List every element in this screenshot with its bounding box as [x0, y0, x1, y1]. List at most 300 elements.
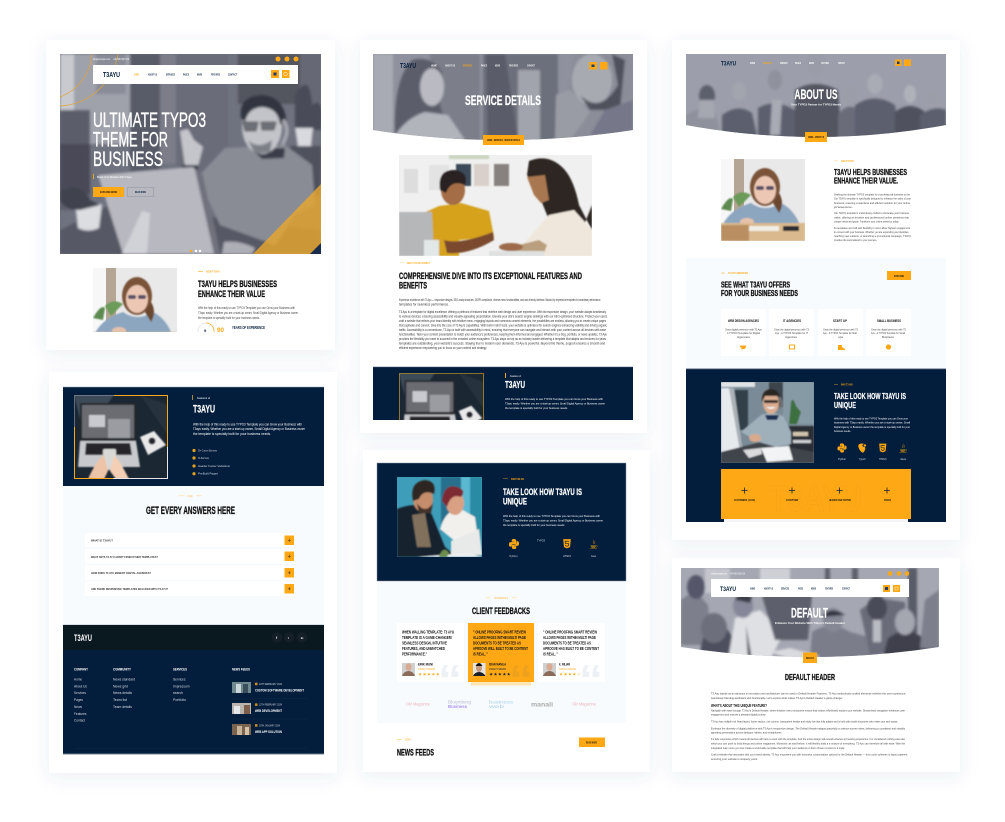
testimonial card 1: FEATURES, AND UNMATCHED — [402, 646, 445, 651]
hero photo — [60, 54, 321, 254]
partner logos: business — [489, 700, 513, 704]
technology icons: HTML5 — [563, 554, 572, 558]
footer column: news feeds: CUSTOM SOFTWARE DEVELOPMENT — [255, 688, 305, 692]
FAQ rows — [85, 533, 295, 596]
about section text: T3ayu easily. Whether you are a start-up owner, Small Digital Agency or Business owner — [198, 311, 299, 315]
partner logos: Bloomberg — [448, 700, 472, 704]
testimonial card 1: ★★★★★ — [418, 672, 440, 676]
footer column: news feeds: 10TH JANUARY 2024 — [259, 724, 281, 728]
navigation bar — [93, 65, 298, 84]
footer column: community: News details — [113, 691, 132, 695]
footer column: community — [113, 668, 135, 709]
about section text: ENHANCE THEIR VALUE — [198, 289, 265, 299]
unique body copy: T3ayu easily. Whether you are a start-up owner, Small Digital Agency or Business owner — [503, 518, 603, 522]
unique body copy: With the help of this ready to use TYPO3 Template you can Grow your Business with — [503, 514, 600, 518]
default body copy: T3 Ayu stands as an advance in innovation and architecture can be used in Default Header Features. T3 Ayu meticulously crafted elements redefine the user experience, — [711, 692, 906, 696]
footer column: company: About Us — [74, 684, 87, 688]
service card: start up — [818, 309, 863, 356]
service features band: the template is specially built for your business needs. — [505, 406, 568, 410]
footer column: services — [173, 668, 190, 702]
features band — [63, 386, 324, 486]
orange stats panel: CUSTOM — [786, 498, 799, 502]
footer top: T3AYU — [74, 633, 92, 643]
footer column: community: News standard — [113, 678, 135, 682]
about text block: ENHANCE THEIR VALUE. — [834, 176, 898, 186]
default nav bar: FEATURES — [825, 588, 833, 590]
about text block: presence. — [834, 205, 853, 209]
technology icons: Python — [510, 554, 518, 558]
hero title: THEME FOR — [93, 128, 168, 152]
navigation bar: PAGES — [183, 74, 189, 76]
default title: Enhance Your Website With T3ayu's Default Header — [775, 621, 846, 625]
about nav: ABOUT US — [763, 62, 772, 65]
why body copy: With the help of this ready to use TYPO3 Template you can Grow your — [834, 416, 908, 420]
service photo: two people at laptop — [399, 155, 592, 256]
why body copy: Digital Agency or Business owner the template is specially built for your — [834, 425, 910, 429]
experience gauge: 9 — [204, 328, 207, 333]
unique body copy: the template is specially built for your business needs. — [503, 523, 565, 527]
orange stats panel: CUSTOMERS (44.6%) — [734, 498, 755, 502]
navigation bar: NEWS — [197, 74, 202, 76]
default top bar: +49 000 000 000 — [730, 572, 745, 576]
read more button: READ MORE — [586, 740, 597, 744]
about nav: NEWS — [809, 62, 814, 65]
panel: service details preview — [360, 40, 647, 449]
service card: IT agencies: Agencies — [785, 336, 798, 339]
testimonial card 1: PERFORMANCE." — [402, 652, 427, 656]
testimonial card 1: FOUNDER, T3 TEMPLATES — [418, 668, 435, 671]
footer column: news feeds — [232, 668, 307, 735]
service title: SERVICE DETAILS — [465, 92, 541, 108]
service card: small business: Ayu - A TYPO3 Template for Small — [871, 332, 905, 335]
default nav bar — [711, 579, 909, 597]
about nav: CONTACT — [838, 62, 845, 65]
testimonial card 1 — [397, 623, 464, 703]
testimonial card 3: FOUNDER, T3 TEMPLATES — [559, 668, 576, 671]
top bar — [93, 56, 298, 62]
testimonial card 3: K. WILIAM — [559, 662, 570, 666]
technology icons: HTML5 — [879, 458, 887, 461]
default body copy: engagement and ensures a pleasant digital journey. — [711, 712, 766, 716]
partner logos — [406, 700, 596, 709]
technology icons — [509, 538, 597, 558]
technology icons — [837, 443, 907, 461]
FAQ rows: ARE THERE RESPONSIVE TEMPLATES INCLUDED WITH T3 AYU? — [91, 587, 168, 591]
FAQ section: GET EVERY ANSWERS HERE — [146, 505, 235, 517]
panel: home page preview — [46, 40, 335, 350]
default body copy: WHAT'S ABOUT THIS UNIQUE FEATURE? — [711, 703, 767, 708]
footer column: community: COMMUNITY — [113, 668, 131, 672]
testimonial card 1: WHEN WALLING TEMPLATE: T3 AYU — [402, 630, 454, 634]
about hero: team photo — [686, 54, 946, 137]
testimonial card 2: highlighted — [468, 623, 534, 703]
about text block — [834, 159, 911, 242]
testimonial card 2: highlighted: ALLOWS PAGES WITHIN MULTI PAGE — [473, 635, 526, 640]
panel: about us preview — [672, 40, 960, 540]
service label: WHAT YOU GET FROM IT — [407, 261, 430, 265]
service card: web design agencies: a TYPO3 Template for Digital — [727, 332, 760, 335]
about text block: Its templates are built with flexibility in mind, allow highest engagement — [834, 226, 910, 230]
navigation bar: HOME — [134, 74, 139, 76]
footer column: news feeds: WEB APP SOLUTION — [255, 730, 282, 734]
about nav: FEATURES — [821, 62, 829, 65]
service card: web design agencies — [721, 309, 766, 356]
partner logos: web — [489, 704, 505, 709]
default heading: DEFAULT HEADER — [785, 672, 835, 682]
news feeds heading: NEWS FEEDS — [397, 748, 434, 758]
footer column: company: News — [74, 705, 82, 709]
service body copy: templates for seamless performance. — [399, 302, 449, 306]
service card: start up: Ayu - A TYPO3 Template for Start — [823, 332, 857, 335]
FAQ rows: WHAT SETS T3 AYU APART FROM OTHER TEMPLATES? — [91, 555, 158, 559]
feature bullet list: Header Footer Variations — [198, 464, 230, 468]
about breadcrumb — [805, 132, 827, 142]
partner logos: Business — [448, 704, 468, 709]
about text block: Seeking the ultimate TYPO3 template for a professional business to the — [834, 192, 910, 196]
footer column: community: Team details — [113, 705, 132, 709]
feature bullet list: PreBuilt Pages — [198, 472, 218, 476]
about section text: the template is specially built for your business needs. — [198, 316, 260, 320]
read more button — [579, 738, 605, 747]
services section: SEE WHAT T3AYU OFFERS — [721, 280, 790, 290]
FAQ section: FAQ — [188, 494, 193, 498]
FAQ section — [63, 486, 324, 625]
about photo — [93, 268, 177, 332]
technology icons: Java — [900, 458, 907, 461]
features band: Features of — [197, 396, 210, 400]
footer column: company — [74, 668, 88, 722]
testimonial card 1: SEAMLESS DESIGN, INTUITIVE — [402, 640, 447, 646]
default body copy: Embrace the diversity of digital platforms with T3 Ayu's responsive design. The Default Header adapts gracefully to various screen sizes, delivering a consistent and visually — [711, 726, 905, 730]
service nav: FEATURES — [509, 64, 518, 68]
testimonial card 2: highlighted: APROOVE WILL BUILT TO BE CONTENT — [473, 646, 528, 651]
about text block: T3AYU HELPS BUSINESSES — [834, 168, 907, 177]
experience gauge — [198, 323, 265, 334]
panel: default header preview — [672, 558, 960, 772]
top bar: +49 000 000 000 — [113, 57, 129, 61]
view more button — [887, 271, 911, 280]
service body copy: that captivate and convert. Dive into the core of T3 Ayu's capabilities. With built-in SEO tools, your website is optimized for search engines enhancing visibility and driving organic — [399, 324, 607, 328]
service body copy: provides the flexibility you need to succeed in the crowded online ecosystem. T3 Ayu stays on top as an industry leader delivering a template that adapts and endures for years — [399, 337, 606, 341]
footer column: services: SERVICES — [173, 668, 187, 672]
hero subtitle — [93, 174, 132, 179]
testimonial card 2: highlighted: ISIGN MANILA — [489, 662, 506, 666]
service body copy — [399, 298, 607, 350]
default body copy: It's fully responsive which means all devices will have to work with the template. And the entire design will overall enhance a browsing experience. It is considered nothing else else — [711, 737, 905, 741]
navigation bar: T3AYU — [103, 72, 120, 79]
service body copy: Experience excellence with T3 Ayu — responsive designs, SEO-ready structures, GDPR compliance, diverse menu functionalities, and user-friendly interface. Backed by impressive templates for seamless performance. — [399, 298, 601, 302]
service nav: CONTACT — [527, 64, 535, 68]
about title: ABOUT US — [794, 86, 838, 102]
default nav bar: ABOUT US — [764, 588, 773, 590]
default nav bar: PAGES — [798, 588, 803, 590]
about title: Your TYPO3 Partner for TYPO3 Needs — [791, 102, 841, 106]
service body copy: craft a website that reflects your brand identity with intuitive menu, engaging layouts and numerous content elements, the possibilities are endless, allowing you to create unique pages — [399, 319, 606, 323]
service nav: T3AYU — [400, 63, 416, 70]
service card: start up: Grow the digital presence with T3 — [823, 328, 859, 331]
service heading — [399, 271, 582, 290]
about title — [791, 86, 841, 106]
footer column: services: Services — [173, 678, 186, 682]
photo: two people at laptop — [397, 477, 482, 557]
why heading: TAKE LOOK HOW T3AYU IS — [834, 392, 906, 401]
technology icons: Python — [838, 458, 847, 461]
service features band: With the help of this ready to use TYPO3 Template you can Grow your Business with — [505, 397, 603, 401]
default body copy: which you can push to build things and online magazines. Moreover, as said before, it will flexibly build a a mixture of everything. T3 Ayu can therefore all with ease. With the — [711, 742, 905, 746]
orange stats panel: HEADER AND FOOTER — [829, 498, 851, 502]
service card: small business — [866, 309, 911, 356]
about text block: reaching new markets, or launching a promotional campaign, T3AYU — [834, 234, 911, 238]
footer column: company: COMPANY — [74, 668, 88, 672]
default body copy: appealing presentation across desktops, tablets, and smartphones. — [711, 730, 782, 734]
about text block: provides the tools tailored to your success. — [834, 238, 877, 242]
orange stats panel: PAGES — [884, 498, 891, 502]
default body copy: integrated map menu you can create a world-wide template that will help your audience in their chosen content in a snap. — [711, 746, 845, 750]
experience gauge: YEARS OF EXPERIENCE — [232, 325, 265, 330]
technology icons: TYPO3 — [537, 538, 546, 542]
hero subtitle: Boost Your Website With T3ayu — [97, 175, 132, 179]
testimonial card 3: DOCUMENTS TO BE TREATED AS — [543, 640, 591, 646]
testimonial card 3: ALLOWS PAGES WITHIN MULTI PAGE — [543, 635, 596, 640]
feature bullet list: 30+ Custom Elements — [198, 448, 217, 452]
service features band — [373, 366, 633, 449]
panel: features, FAQ and footer preview — [49, 372, 337, 773]
service card: IT agencies: Ayu - A TYPO3 Template for IT — [775, 332, 808, 335]
service nav: SERVICES — [463, 64, 472, 68]
service card: web design agencies: Agencies — [737, 336, 751, 339]
why body copy: business needs. — [834, 429, 851, 433]
default breadcrumb: DEFAULT — [806, 657, 814, 660]
panel: unique features and testimonials preview — [363, 450, 650, 772]
footer column: company: Features — [74, 712, 87, 716]
feature bullet list — [192, 448, 230, 476]
service card: IT agencies: IT AGENCIES — [783, 319, 801, 323]
service card: start up: ups — [838, 336, 844, 339]
why label — [834, 382, 853, 386]
view more button: EXPLORE — [894, 274, 904, 278]
service features band: T3ayu easily. Whether you are a start-up owner, Small Digital Agency or Business owner — [505, 402, 605, 406]
orange stats panel — [721, 469, 911, 522]
navigation bar: ABOUT US — [148, 74, 157, 76]
service card: start up: START UP — [833, 319, 847, 323]
testimonial card 2: highlighted: “ — [509, 656, 533, 703]
service body copy: T3 Ayu is a template for digital excellence offering a plethora of features that redefine web design and user experience. With its responsive design, your website adapts seamlessly — [399, 310, 606, 314]
footer body — [63, 650, 324, 754]
technology icons: Typo3 — [859, 458, 866, 461]
hero title — [93, 109, 206, 171]
about text block: Our T3AYU template is specifically designed to enhance the value of your — [834, 197, 911, 201]
service body copy: to various devices, ensuring accessibility and visually appealing presentation. Elevate your site's search engine rankings with our SEO-optimized structure. Protect your users — [399, 314, 607, 318]
partner logos: Oki Magazine — [406, 702, 430, 706]
navigation bar: SERVICES — [166, 74, 175, 76]
testimonial card 3: " ONLINE PROOFING SMART REVIEW — [543, 630, 597, 634]
why us section — [686, 368, 946, 522]
testimonial card 2: highlighted: " ONLINE PROOFING SMART REVIEW — [473, 630, 526, 634]
testimonial card 3: “ — [579, 656, 603, 703]
about text block: ABOUT T3AYU — [841, 159, 854, 163]
service body copy: functionalities. Tailor your content presentation to match your audience's preferences, keeping them informed and engaged. Whether it's a blog, portfolio, or news updates, T3 Ayu — [399, 332, 607, 336]
about text block: business, ensuring a seamless and efficient solution for your online — [834, 201, 910, 205]
about nav — [721, 60, 911, 68]
why label: WHY T3 AYU — [841, 382, 853, 386]
about nav: PAGES — [795, 62, 801, 65]
about breadcrumb: HOME - ABOUT US — [808, 136, 824, 139]
breadcrumb: HOME - SERVICES - SERVICE DETAILS — [487, 139, 520, 142]
service card: IT agencies: Grow the digital presence with T3 — [774, 328, 810, 331]
unique label — [503, 477, 524, 481]
service heading: COMPREHENSIVE DIVE INTO ITS EXCEPTIONAL FEATURES AND — [399, 271, 582, 281]
about photo — [721, 159, 805, 241]
footer column: services: Impressum — [173, 684, 190, 688]
service features band: T3AYU — [505, 380, 525, 391]
about text block: unique needs and goals. Transform your online presence today. — [834, 220, 899, 224]
footer column: company: Home — [74, 678, 82, 682]
about nav: SERVICES — [780, 62, 788, 65]
service card: small business: SMALL BUSINESS — [877, 319, 901, 323]
footer top — [63, 624, 324, 650]
features band: With the help of this ready to use TYPO3 Template you can Grow your Business with — [193, 422, 302, 426]
services section: T3 AYU SERVICES — [728, 271, 748, 275]
about section text: ABOUT T3AYU — [206, 270, 220, 274]
unique heading: TAKE LOOK HOW T3AYU IS — [503, 487, 582, 497]
footer column: services: search — [173, 691, 183, 695]
service hero photo — [373, 54, 633, 140]
about text block: value, offering an intuitive and professional online presence that — [834, 216, 909, 220]
testimonial card 1: TEMPLATE IS A GAME-CHANGER! — [402, 635, 452, 640]
why heading — [834, 392, 906, 410]
default top bar: info@example.com — [711, 572, 728, 576]
service nav: PAGES — [481, 64, 487, 68]
about text block: Our T3AYU template is meticulously crafted to showcase your business — [834, 211, 909, 215]
footer column: community: News grid — [113, 684, 128, 688]
hero buttons: EXPLORE MORE — [100, 190, 117, 194]
hero buttons: READ MORE — [135, 190, 146, 194]
service nav — [400, 62, 608, 70]
service nav: HOME — [431, 64, 437, 68]
navigation bar: FEATURES — [211, 74, 220, 76]
default nav bar: SERVICES — [781, 588, 789, 590]
default nav bar: HOME — [750, 588, 755, 590]
about section text — [198, 270, 299, 320]
footer column: news feeds: WEB DEVELOPMENT — [255, 709, 283, 713]
partner logos: Oki Magazine — [572, 702, 596, 706]
default body copy: seamlessly blending aesthetics with functionality. Let's explore what makes T3 Ayu's Default Header a game changer. — [711, 696, 843, 700]
news feeds heading — [397, 738, 434, 758]
service features band: Features of — [510, 374, 521, 378]
unique label: WHAT WE DO — [511, 477, 524, 481]
why body copy — [834, 416, 910, 433]
client feedback section: CLIENT FEEDBACKS — [472, 606, 530, 616]
footer column: services: Portfolio — [173, 698, 186, 702]
default top bar — [711, 571, 909, 576]
services section: FOR YOUR BUSINESS NEEDS — [721, 288, 798, 298]
service card: web design agencies: Grow digital presence with T3 Ayu — [725, 328, 763, 331]
testimonial card 2: highlighted: FOUNDER, T3 TEMPLATES — [489, 668, 506, 671]
client feedback section: TESTIMONIALS — [494, 596, 508, 600]
service body copy: efficient experience empowering you to focus on your content and strategy. — [399, 346, 487, 350]
news feeds heading: NEWS — [405, 738, 411, 742]
about section text: T3AYU HELPS BUSINESSES — [198, 279, 277, 289]
about nav: T3AYU — [721, 60, 736, 68]
service card: IT agencies — [769, 309, 814, 356]
unique heading: UNIQUE — [503, 496, 527, 506]
footer column: news feeds: 12TH FEBRUARY 2024 — [259, 683, 283, 686]
default title: DEFAULT — [791, 605, 828, 621]
FAQ rows: WHAT IS T3AYU? — [91, 538, 113, 542]
hero title: BUSINESS — [93, 148, 163, 171]
default body copy: ensuring your website is uniquely yours. — [711, 757, 758, 761]
default hero: meeting photo — [681, 568, 939, 662]
partner logos: manali — [531, 702, 553, 708]
service card: small business: Business — [882, 336, 895, 339]
default body copy: Navigate with ease through T3 Ayu's Default Header, where intuitive menu structures ensure that visitors effortlessly explore your website. Streamlined navigation enhances user — [711, 708, 905, 712]
photo: man at computer — [721, 382, 814, 463]
default body copy: T3 Ayu has multiple rich Head layout, footer section, one column, transparent header and sticky bar that fully adapts and is built with simple structures who make your web space. — [711, 720, 898, 724]
footer top: f — [276, 636, 278, 640]
service card: web design agencies: WEB DESIGN AGENCIES — [728, 319, 759, 323]
service body copy: templates are outstanding, your website's success. Staying true to modern user demands, T3 Ayu is powerful. Beyond the theme, support ensures a smooth and — [399, 342, 605, 346]
testimonial card 3: ★★★★☆ — [559, 672, 581, 676]
orange stats panel: T3AYU — [770, 478, 862, 519]
default body copy — [711, 692, 908, 761]
testimonial card 1: ERIK MUNI — [418, 662, 433, 666]
about section text: With the help of this ready to use TYPO3 Template you can Grow your Business with — [198, 306, 295, 310]
feature bullet list: 99+ Best Scores — [198, 456, 209, 460]
navy unique section — [377, 463, 626, 581]
navigation bar: CONTACT — [228, 74, 237, 76]
default nav bar: T3AYU — [720, 586, 736, 593]
footer top: t — [288, 636, 289, 640]
FAQ rows: HOW DOES T3 AYU BENEFIT DIGITAL AGENCIES? — [91, 571, 151, 575]
client feedback section — [377, 582, 626, 723]
service nav: NEWS — [495, 64, 500, 68]
service card: small business: Grow the digital presence with T3 — [871, 328, 907, 331]
top bar: info@example.com — [93, 57, 110, 61]
testimonial card 3: APROOVE HAS BUILT TO BE CONTENT — [543, 646, 599, 651]
experience gauge: 90 — [217, 328, 225, 334]
why body copy: business with T3ayu easily. Whether you are a start-up owner, Small — [834, 420, 910, 424]
features band: the template is specially built for your business needs. — [193, 432, 271, 436]
testimonial card 3: IS REAL. " — [543, 652, 558, 656]
testimonial card 2: highlighted: DOCUMENTS TO BE TREATED AS — [473, 640, 521, 646]
hero title: ULTIMATE TYPO3 — [93, 109, 206, 132]
default nav bar: CONTACT — [842, 588, 850, 590]
default body copy: Craft a website that resonates with your brand identity. T3 Ayu empowers you with extensive customization options for the Default Header — from color schemes to layout patterns, — [711, 752, 908, 756]
unique body copy — [503, 514, 603, 527]
service body copy: traffic. Accessibility is a cornerstone, T3 Ayu is built with accessibility in mind, ensuring that everyone can navigate and interact with your content across all devices with ease — [399, 328, 606, 332]
testimonial card 3 — [538, 623, 605, 703]
testimonial card 2: highlighted: ★★★★★ — [489, 672, 511, 676]
footer column: community: Team list — [113, 698, 127, 702]
technology icons: Java — [591, 554, 597, 558]
testimonial card 2: highlighted: IS REAL. " — [473, 652, 488, 656]
why heading: UNIQUE — [834, 401, 856, 410]
services section — [686, 258, 946, 369]
about nav: HOME — [750, 62, 755, 65]
service nav: ABOUT US — [445, 64, 455, 68]
footer column: news feeds: 12TH FEBRUARY 2024 — [259, 704, 283, 707]
footer top: in — [301, 636, 304, 640]
default nav bar: NEWS — [811, 588, 816, 590]
features band: T3ayu easily. Whether you are a start-up owner, Small Digital Agency or Business owner — [193, 427, 306, 431]
footer column: news feeds: NEWS FEEDS — [232, 668, 250, 672]
unique heading — [503, 487, 582, 506]
footer column: company: Contact — [74, 718, 85, 722]
footer column: company: Services — [74, 691, 86, 695]
default title — [775, 605, 846, 625]
breadcrumb — [483, 135, 524, 145]
hero buttons — [93, 187, 154, 197]
